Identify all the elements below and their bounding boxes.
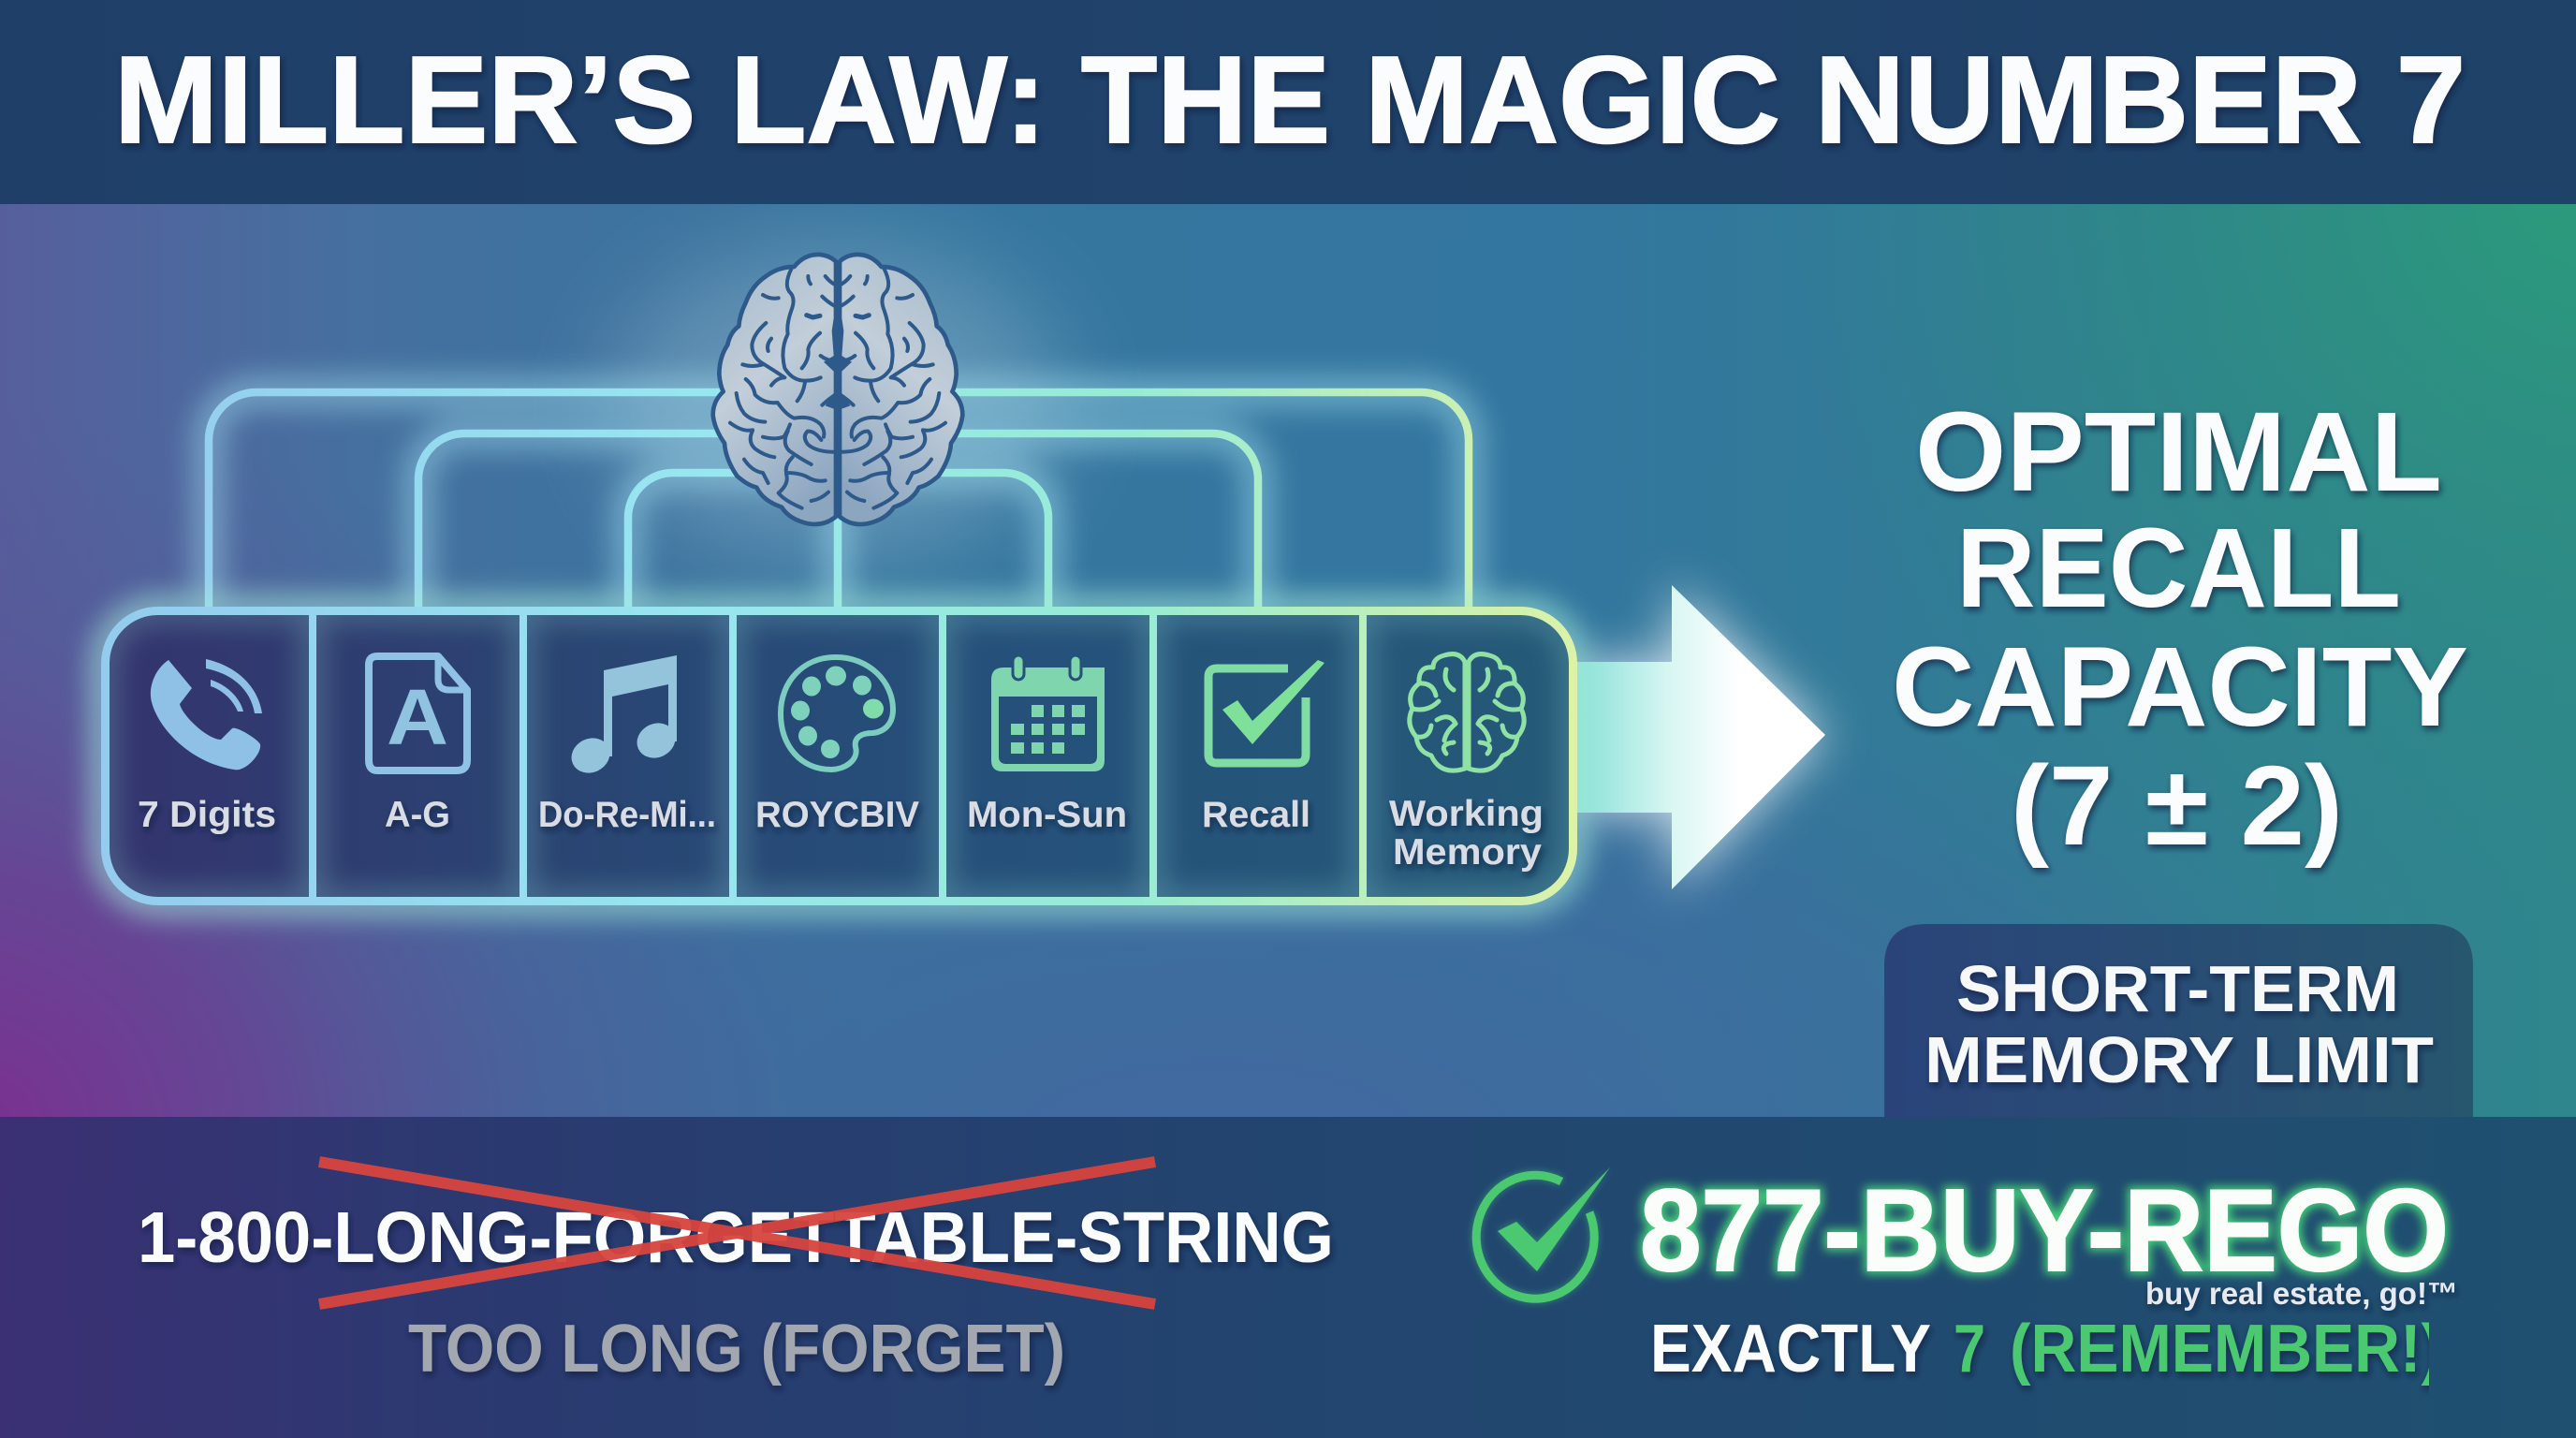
- item label: Do-Re-Mi: Do-Re-Mi...: [538, 795, 716, 835]
- item label: Mon-Sun: Mon-Sun: [967, 795, 1127, 835]
- bad example: long number crossed out: [138, 1162, 1334, 1304]
- caption: exactly 7: EXACTLY: [1650, 1312, 1931, 1387]
- caption: too long: TOO LONG (FORGET): [408, 1312, 1065, 1387]
- icon: document letter A: [369, 656, 467, 770]
- item label: A-G: A-G: [385, 795, 450, 835]
- seven item chunk bar: [105, 610, 1573, 902]
- icon: calendar: [991, 655, 1105, 771]
- footer band: [0, 1117, 2576, 1438]
- optimal recall capacity heading: CAPACITY: [1892, 623, 2468, 750]
- arrow to optimal recall: [1577, 585, 1825, 889]
- short-term memory limit tab: MEMORY LIMIT: [1925, 1023, 2434, 1096]
- caption: exactly 7: 7: [1954, 1312, 1985, 1387]
- item label: Working Memory: Memory: [1393, 832, 1542, 873]
- icon: palette: [781, 657, 893, 770]
- main gradient background: [0, 204, 2576, 1117]
- header banner: [0, 0, 2576, 204]
- icon: central brain: [713, 255, 962, 524]
- caption: exactly 7: [1650, 1312, 2442, 1387]
- bad example: long number crossed out: 1-800-LONG-FORGETTABLE-STRING: [138, 1197, 1334, 1278]
- tagline: buy real estate, go!™: [2145, 1276, 2458, 1311]
- item label: Working Memory: [1389, 794, 1544, 873]
- item label: Recall: Recall: [1202, 795, 1310, 835]
- caption: exactly 7: (REMEMBER!): [2010, 1312, 2442, 1387]
- title: MILLER’S LAW: THE MAGIC NUMBER 7: [114, 31, 2466, 169]
- optimal recall capacity heading: (7 ± 2): [2011, 741, 2343, 869]
- short-term memory limit tab: SHORT-TERM: [1956, 952, 2399, 1025]
- icon: small brain: [1410, 654, 1524, 770]
- short-term memory limit tab: [1884, 924, 2473, 1123]
- optimal recall capacity heading: RECALL: [1956, 504, 2401, 631]
- item label: ROYCBIV: ROYCBIV: [755, 795, 919, 835]
- icon: document letter A: A: [387, 673, 448, 761]
- icon: green check in ring: [1476, 1167, 1610, 1299]
- item label: Working Memory: Working: [1389, 794, 1544, 834]
- optimal recall capacity heading: [1892, 388, 2468, 869]
- connector wires from items to brain: [209, 392, 1469, 609]
- icon: checkbox: [1208, 660, 1325, 763]
- icon: music note: [565, 655, 681, 779]
- icon: phone: [151, 659, 262, 770]
- optimal recall capacity heading: OPTIMAL: [1915, 388, 2442, 515]
- good example: memorable phone number: 877-BUY-REGO: [1640, 1167, 2449, 1296]
- item label: 7 Digits: 7 Digits: [138, 795, 276, 835]
